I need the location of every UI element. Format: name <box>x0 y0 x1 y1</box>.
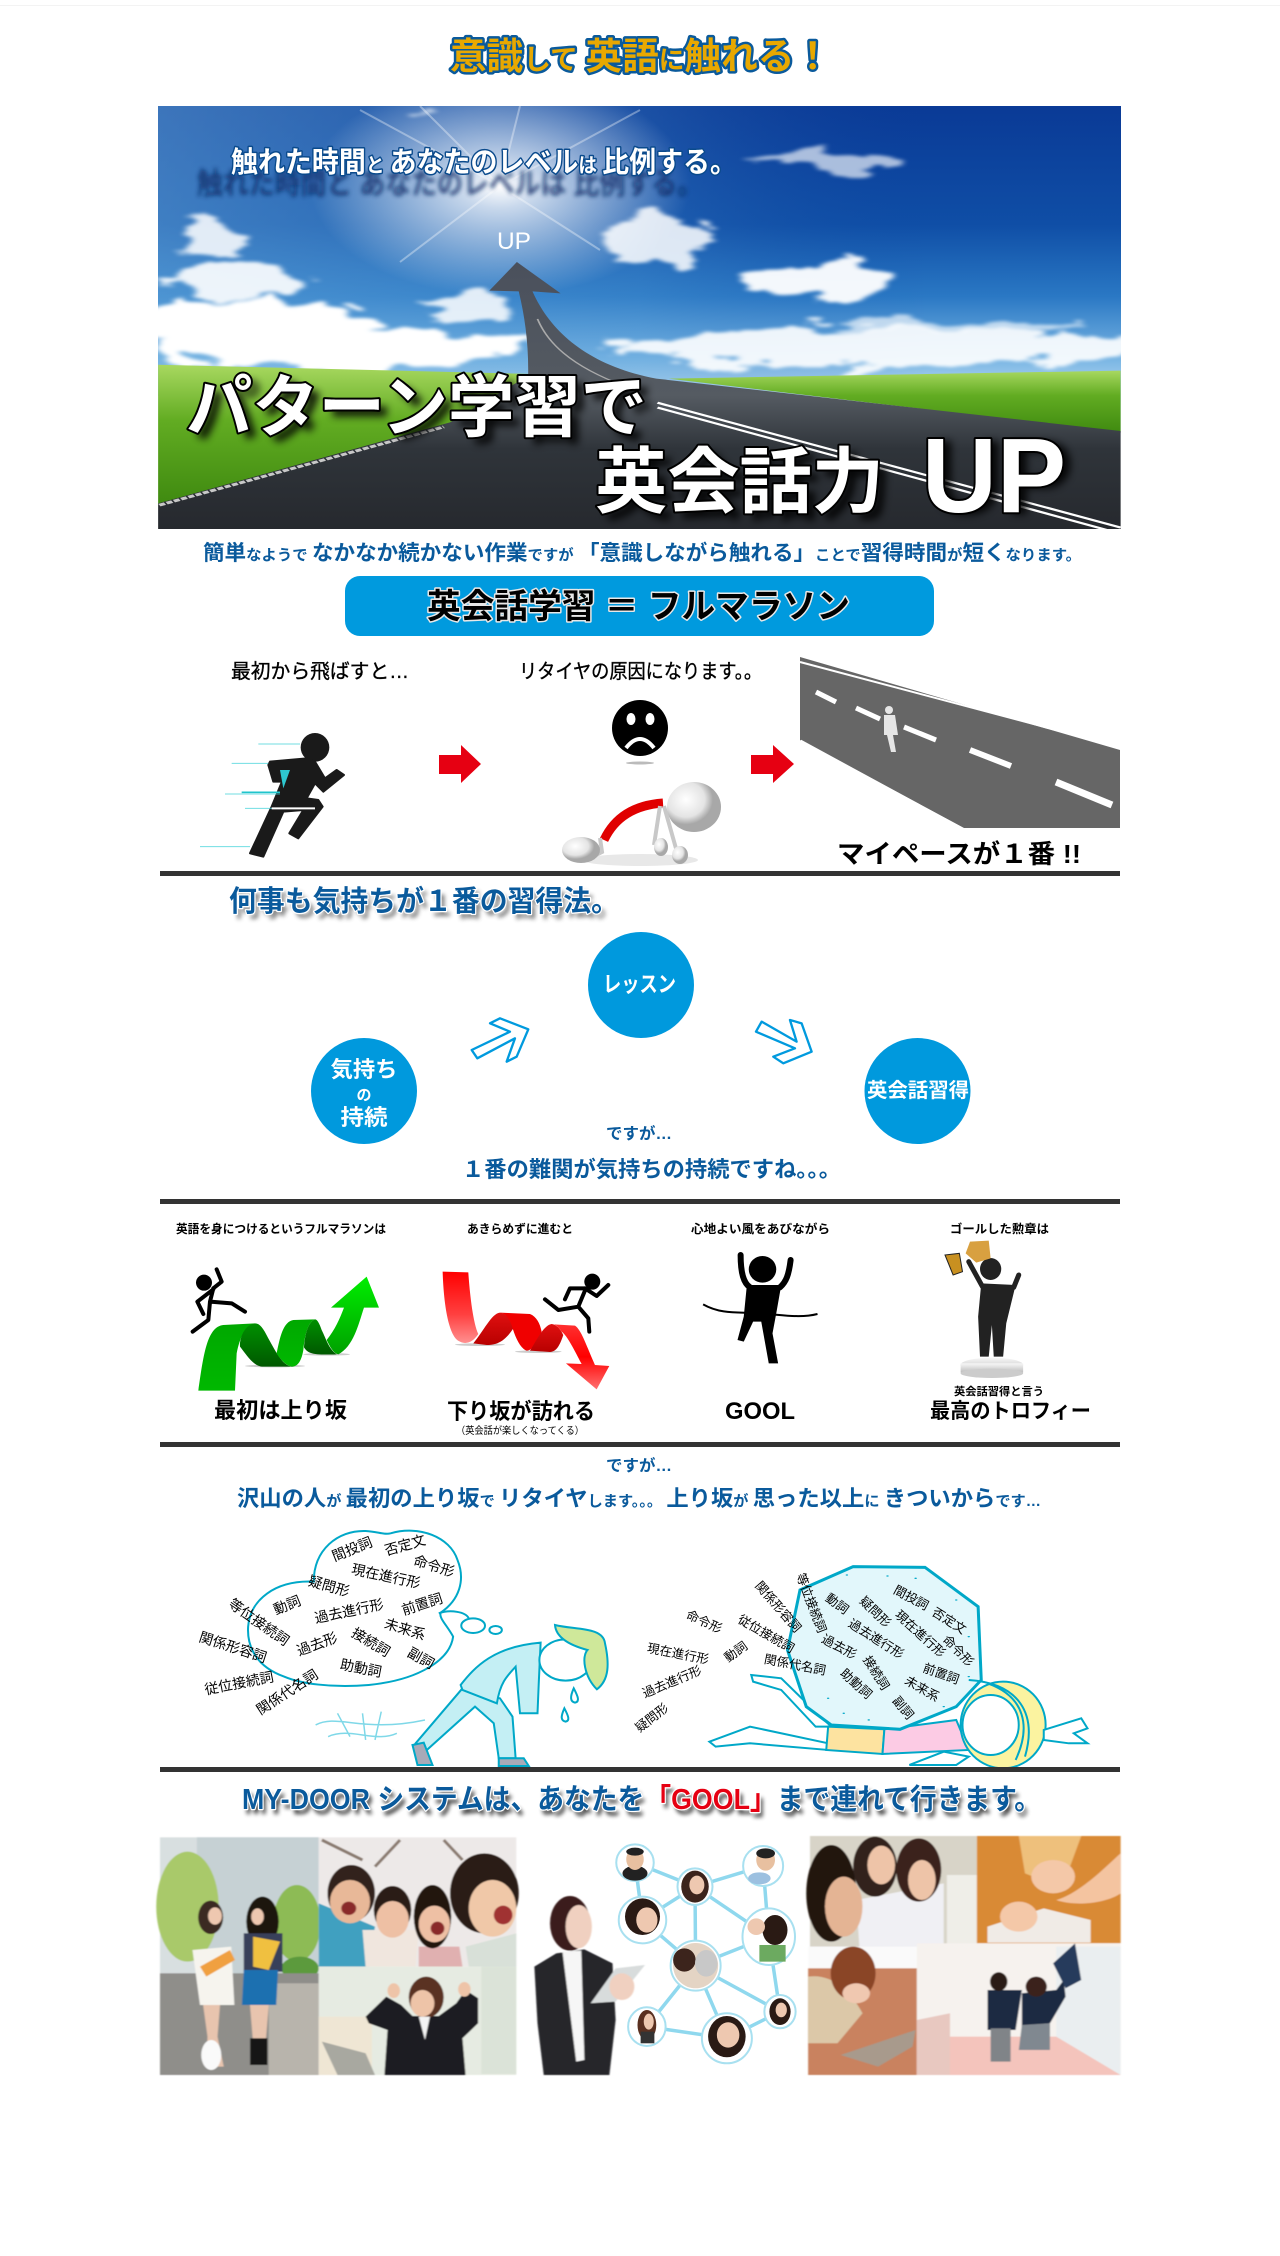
photo: girl with laptop <box>808 1947 917 2075</box>
caption: my pace: マイペースが１番 !! <box>837 839 1081 869</box>
word cloud: scattered grammar terms: 助動詞 <box>837 1666 875 1702</box>
word cloud: left grammar terms: 動詞 <box>271 1592 303 1618</box>
network portraits <box>616 1844 796 2063</box>
word cloud: scattered grammar terms: 過去進行形 <box>846 1616 907 1662</box>
photo collage: right <box>806 1836 1121 2075</box>
word cloud: scattered grammar terms: 接続詞 <box>860 1653 893 1693</box>
arrow: to lesson <box>472 1018 528 1062</box>
node: English mastery: 英会話習得 <box>867 1079 969 1102</box>
word cloud: scattered grammar terms: 現在進行形 <box>892 1608 948 1660</box>
heading: MY-DOOR system: MY-DOOR システムは、あなたを「GOOL」まで連れて行きます。 <box>242 1783 1041 1816</box>
icon: walking figure <box>884 706 898 752</box>
crushed woman legs <box>709 1675 831 1750</box>
word cloud: scattered grammar terms: 否定文 <box>929 1605 969 1637</box>
text: however: ですが… <box>606 1456 672 1475</box>
boulder <box>788 1567 981 1729</box>
hair and face <box>961 1682 1046 1768</box>
icon: sad face <box>612 700 668 764</box>
illustration: student crushed by boulder <box>632 1567 1088 1768</box>
photo collage: left <box>156 1837 519 2075</box>
word cloud: scattered grammar terms: 動詞 <box>823 1591 851 1617</box>
text: many give up: 沢山の人が 最初の上り坂で リタイヤします。。。 上り坂が 思った以上に きついからです… <box>237 1486 1041 1511</box>
banner: marathon equation: 英会話学習 ＝ フルマラソン <box>427 588 850 626</box>
chart: red falling arrow with runner <box>443 1272 609 1389</box>
word cloud: scattered grammar terms <box>632 1571 977 1735</box>
intro sentence: 簡単なようで なかなか続かない作業 ですが 「意識しながら触れる」 ことで習得時間が短くなります。 <box>203 541 1081 565</box>
note: English becomes fun: （英会話が楽しくなってくる） <box>456 1424 584 1437</box>
bent man body <box>416 1643 541 1758</box>
panel: goal <box>691 1221 830 1425</box>
photo: two students walking <box>156 1837 321 2075</box>
hero headline <box>186 370 1064 516</box>
hero headline shadow: パターン学習で <box>194 377 655 453</box>
hero tagline shadow: 触れた時間と あなたのレベルは 比例する。 <box>197 168 703 201</box>
photo: typing on wooden floor <box>977 1836 1121 1943</box>
node: lesson <box>588 932 694 1038</box>
icon: exhausted white figure <box>562 782 721 866</box>
node: English mastery <box>864 1038 970 1144</box>
node: keep motivation: 気持ち <box>330 1057 398 1082</box>
hero grass fields <box>158 365 1121 504</box>
hero road arrow <box>158 262 1121 529</box>
note: mastery is called: 英会話習得と言う <box>954 1384 1044 1398</box>
word cloud: left grammar terms: 命令形 <box>412 1552 456 1580</box>
icon: figure raising trophy <box>945 1241 1023 1378</box>
word cloud: scattered grammar terms: 関係代名詞 <box>763 1651 827 1678</box>
panel: hero road photo <box>138 76 1138 537</box>
word cloud: scattered grammar terms: 現在進行形 <box>646 1641 710 1667</box>
heading: MY-DOOR system: MY-DOOR システムは、あなたを「GOOL」まで連れて行きます。 <box>245 1788 1044 1821</box>
top hairline <box>0 5 1280 6</box>
photo: woman with tablet <box>534 1896 645 2075</box>
word cloud: scattered grammar terms: 過去進行形 <box>640 1663 704 1701</box>
word cloud: scattered grammar terms: 未来系 <box>902 1674 942 1704</box>
arrow: to mastery <box>756 1020 812 1063</box>
banner: marathon equation <box>345 576 934 636</box>
word cloud: scattered grammar terms: 命令形 <box>684 1607 725 1636</box>
illustration: exhausted student with thought cloud <box>197 1531 608 1766</box>
node: lesson: レッスン <box>603 972 676 997</box>
divider <box>160 1442 1120 1447</box>
word cloud: left grammar terms: 過去進行形 <box>313 1596 385 1626</box>
hero headline: パターン学習で <box>186 370 647 446</box>
word cloud: left grammar terms: 過去形 <box>295 1629 339 1659</box>
caption: downhill lead: あきらめずに進むと <box>467 1221 573 1236</box>
photo: students running in hallway <box>917 1943 1121 2075</box>
word cloud: scattered grammar terms: 命令形 <box>940 1632 977 1670</box>
chart: green rising arrow with runner <box>193 1269 379 1391</box>
photo: businesswoman celebrating <box>319 1967 516 2075</box>
icon: runner breaking tape <box>703 1255 818 1363</box>
hero tagline: 触れた時間と あなたのレベルは 比例する。 <box>231 146 737 179</box>
word cloud: left grammar terms: 未来系 <box>383 1615 427 1643</box>
caption: goal lead: 心地よい風をあびながら <box>691 1221 830 1236</box>
network links <box>635 1863 780 2038</box>
divider <box>160 1199 1120 1204</box>
word cloud: scattered grammar terms: 従位接続詞 <box>735 1611 797 1656</box>
word cloud: scattered grammar terms: 過去形 <box>819 1632 859 1662</box>
word cloud: scattered grammar terms: 等位接続詞 <box>793 1571 830 1635</box>
divider <box>160 1767 1120 1772</box>
node: keep motivation: の <box>356 1087 372 1104</box>
label: best trophy: 最高のトロフィー <box>930 1400 1091 1423</box>
node: keep motivation: 持続 <box>340 1105 388 1130</box>
caption: uphill lead: 英語を身につけるというフルマラソンは <box>176 1221 386 1236</box>
label: downhill comes: 下り坂が訪れる <box>447 1399 595 1424</box>
word cloud: scattered grammar terms: 副詞 <box>890 1693 917 1722</box>
caption: medal lead: ゴールした勲章は <box>950 1221 1049 1236</box>
word cloud: left grammar terms <box>197 1532 456 1718</box>
panel: downhill <box>443 1221 609 1437</box>
arrow: step one <box>439 745 481 783</box>
hero headline shadow: UP <box>930 419 1074 537</box>
word cloud: left grammar terms: 等位接続詞 <box>226 1595 292 1649</box>
word cloud: left grammar terms: 間投詞 <box>330 1534 374 1564</box>
caption: starting too fast: 最初から飛ばすと… <box>231 660 409 683</box>
word cloud: scattered grammar terms: 前置詞 <box>921 1660 961 1687</box>
word cloud: left grammar terms: 関係形容詞 <box>197 1629 269 1665</box>
hero UP label: UP <box>497 228 531 255</box>
photo: four smiling children <box>319 1837 519 1967</box>
word cloud: scattered grammar terms: 疑問形 <box>857 1593 894 1630</box>
shorts <box>826 1727 884 1754</box>
arrow: step two <box>751 745 794 783</box>
word cloud: scattered grammar terms: 疑問形 <box>632 1700 671 1735</box>
panel: trophy <box>930 1221 1091 1423</box>
thought cloud outline <box>248 1531 461 1686</box>
word cloud: scattered grammar terms: 間投詞 <box>891 1582 931 1613</box>
photo collage: network of people <box>534 1844 796 2075</box>
word cloud: left grammar terms: 従位接続詞 <box>203 1668 275 1698</box>
word cloud: left grammar terms: 前置詞 <box>400 1590 444 1618</box>
heading: motivation: 何事も気持ちが１番の習得法。 <box>229 884 619 918</box>
icon: running man <box>200 733 344 857</box>
panel: uphill <box>176 1221 386 1423</box>
word cloud: left grammar terms: 疑問形 <box>307 1573 351 1599</box>
text: however: ですが… <box>606 1124 672 1143</box>
label: GOOL: GOOL <box>725 1398 795 1425</box>
word cloud: scattered grammar terms: 動詞 <box>722 1639 750 1665</box>
hero headline: UP <box>922 417 1066 535</box>
divider <box>160 871 1120 876</box>
caption: causes retiring: リタイヤの原因になります。。 <box>519 660 762 683</box>
word cloud: left grammar terms: 現在進行形 <box>350 1561 422 1591</box>
word cloud: left grammar terms: 副詞 <box>405 1644 437 1672</box>
word cloud: left grammar terms: 接続詞 <box>349 1624 393 1660</box>
title: 意識して 英語に触れる！ <box>450 36 831 77</box>
word cloud: left grammar terms: 関係代名詞 <box>253 1666 321 1718</box>
node: keep motivation <box>311 1038 417 1144</box>
hero headline shadow <box>194 377 1074 537</box>
photo: students looking at screen <box>806 1836 977 1947</box>
hero headline shadow: 英会話力 <box>603 450 892 530</box>
hero headline: 英会話力 <box>595 443 884 523</box>
word cloud: left grammar terms: 助動詞 <box>339 1656 383 1680</box>
text: biggest hurdle: １番の難関が気持ちの持続ですね。。。 <box>462 1157 841 1182</box>
word cloud: scattered grammar terms: 関係形容詞 <box>752 1579 804 1635</box>
word cloud: left grammar terms: 否定文 <box>383 1532 427 1558</box>
heading: motivation: 何事も気持ちが１番の習得法。 <box>233 889 623 923</box>
panel: road with walking figure <box>800 657 1120 830</box>
label: first uphill: 最初は上り坂 <box>214 1398 347 1423</box>
